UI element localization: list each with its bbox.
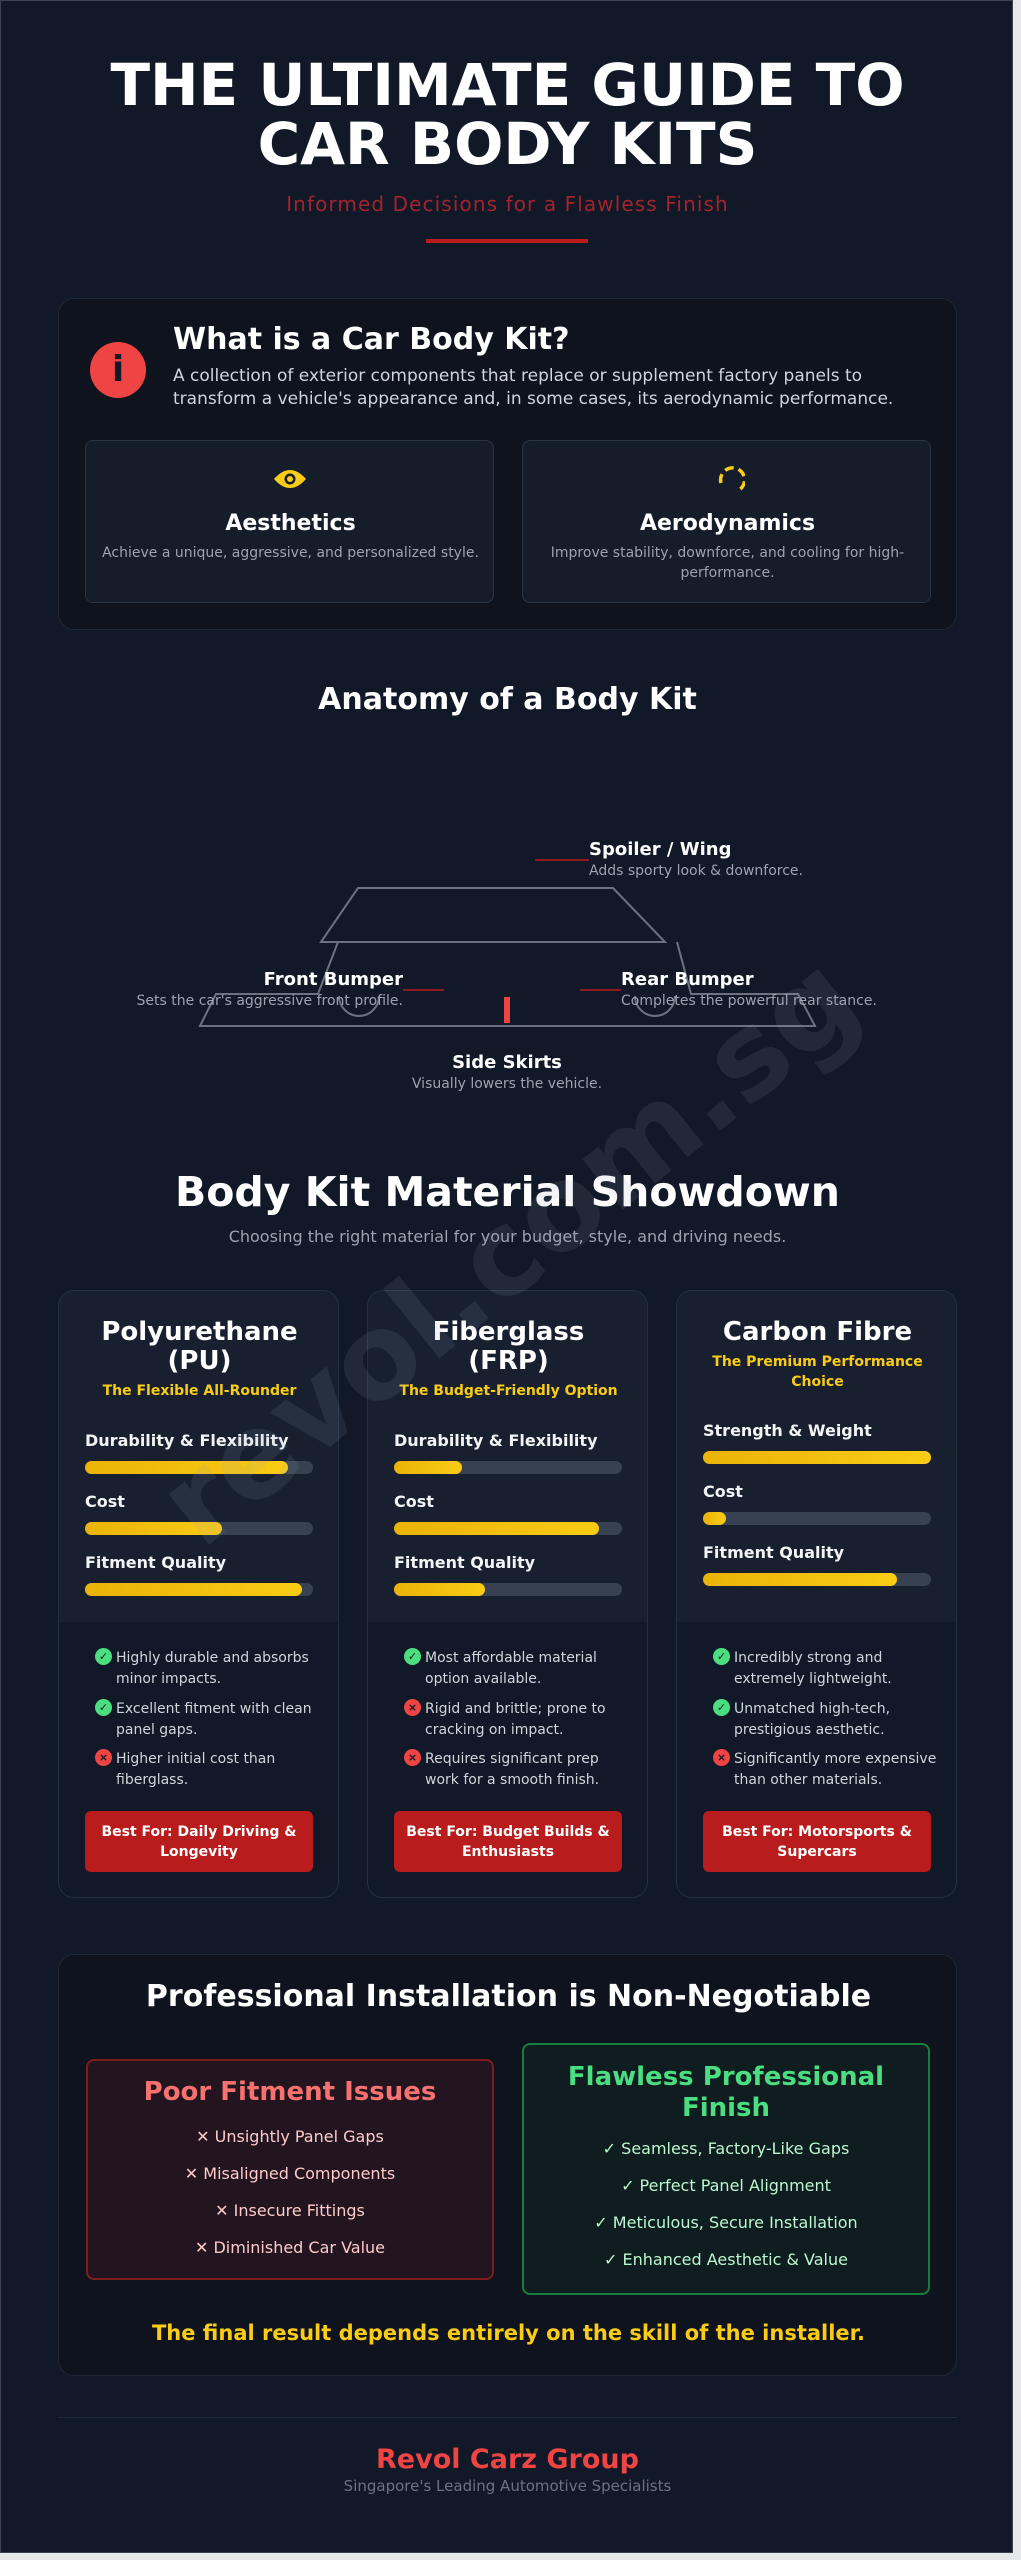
panel: carbon fibre <box>676 1290 957 1898</box>
panel: polyurethane: Highly durable and absorbs minor impacts. <box>116 1650 309 1686</box>
panel: fiberglass: × <box>408 1701 417 1714</box>
panel: carbon fibre: ✓ <box>717 1701 726 1714</box>
panel: carbon fibre: Unmatched high-tech, prestigious aesthetic. <box>734 1701 890 1738</box>
subcard: aerodynamics <box>522 440 931 603</box>
benefits list: ✓ Seamless, Factory-Like Gaps <box>603 2139 849 2158</box>
title: THE ULTIMATE GUIDE TO <box>110 51 905 119</box>
issues list: ✕ Unsightly Panel Gaps <box>196 2127 384 2146</box>
card title <box>433 1317 584 1376</box>
icon: info: i <box>112 349 124 390</box>
heading: material showdown: Body Kit Material Showdown <box>175 1168 840 1216</box>
panel: polyurethane: Higher initial cost than fiberglass. <box>116 1751 275 1788</box>
definition text: transform a vehicle's appearance and, in some cases, its aerodynamic performance. <box>173 389 893 409</box>
panel: fiberglass <box>367 1290 648 1898</box>
best for button: Best For: Budget Builds & <box>406 1824 610 1840</box>
panel: carbon fibre: ✓ <box>717 1650 726 1663</box>
panel: carbon fibre: Significantly more expensive than other materials. <box>734 1751 936 1788</box>
icon: info <box>90 342 146 398</box>
card title: Carbon Fibre <box>723 1317 912 1347</box>
benefits list: ✓ Perfect Panel Alignment <box>621 2176 831 2195</box>
bar: cost <box>85 1492 313 1535</box>
subtitle: Informed Decisions for a Flawless Finish <box>286 192 729 216</box>
issues list: ✕ Insecure Fittings <box>215 2201 365 2220</box>
issues list: ✕ Misaligned Components <box>185 2164 395 2183</box>
bar: strength <box>703 1421 931 1464</box>
callout: The final result depends entirely on the skill of the installer. <box>152 2321 865 2345</box>
best for button: Enthusiasts <box>462 1844 554 1860</box>
benefits list: ✓ Meticulous, Secure Installation <box>594 2213 858 2232</box>
tagline: The Premium Performance Choice <box>712 1354 923 1390</box>
bar: fitment <box>85 1553 313 1596</box>
label: front bumper: Front Bumper <box>264 969 403 990</box>
panel: carbon fibre: Incredibly strong and extremely lightweight. <box>734 1650 892 1686</box>
showdown subtitle: Choosing the right material for your budget, style, and driving needs. <box>229 1227 786 1246</box>
benefits list: ✓ Enhanced Aesthetic & Value <box>604 2250 848 2269</box>
label: spoiler <box>589 839 803 879</box>
panel: polyurethane: ✓ <box>99 1650 108 1663</box>
label: spoiler: Spoiler / Wing <box>589 839 731 860</box>
panel: fiberglass: × <box>408 1751 417 1764</box>
diagram: car body kit anatomy <box>137 839 877 1092</box>
bar: cost <box>703 1482 931 1525</box>
best for button <box>394 1811 622 1872</box>
bar: fitment: Fitment Quality <box>703 1543 844 1562</box>
bar: durability <box>394 1431 622 1474</box>
bar: cost: Cost <box>703 1482 743 1501</box>
best for button: Longevity <box>160 1844 238 1860</box>
box heading: Flawless Professional <box>568 2062 884 2092</box>
bar: cost <box>394 1492 622 1535</box>
icon: airflow <box>718 466 745 490</box>
label: side skirts: Side Skirts <box>452 1052 562 1073</box>
subcard: aesthetics <box>85 440 494 603</box>
heading: Aerodynamics <box>640 511 815 536</box>
best for button <box>85 1811 313 1872</box>
panel: polyurethane: × <box>99 1751 108 1764</box>
icon: eye <box>274 470 306 488</box>
bar: fitment <box>703 1543 931 1586</box>
box: flawless finish <box>522 2043 930 2295</box>
panel: polyurethane <box>58 1290 339 1898</box>
label: rear bumper <box>621 969 877 1009</box>
card title: (FRP) <box>468 1346 549 1376</box>
bar: cost: Cost <box>85 1492 125 1511</box>
description: Improve stability, downforce, and cooling for high-performance. <box>551 545 904 581</box>
panel: fiberglass: Rigid and brittle; prone to cracking on impact. <box>425 1701 606 1738</box>
definition text <box>173 366 893 409</box>
label: side skirts: Visually lowers the vehicle. <box>412 1076 602 1092</box>
panel: professional installation <box>58 1954 957 2376</box>
card title: (PU) <box>168 1346 231 1376</box>
panel: polyurethane: Excellent fitment with clean panel gaps. <box>116 1701 312 1738</box>
watermark: revol.com.sg <box>132 927 884 1573</box>
bar: cost: Cost <box>394 1492 434 1511</box>
label: rear bumper: Rear Bumper <box>621 969 754 990</box>
footer tagline: Singapore's Leading Automotive Specialists <box>344 2477 671 2495</box>
heading: Aesthetics <box>225 511 356 536</box>
best for button: Best For: Motorsports & <box>722 1824 912 1840</box>
panel: carbon fibre: × <box>717 1751 726 1764</box>
bar: durability: Durability & Flexibility <box>85 1431 288 1450</box>
label: side skirts <box>412 1052 602 1092</box>
heading: Professional Installation is Non-Negotiable <box>146 1979 871 2014</box>
label: front bumper <box>137 969 403 1009</box>
best for button <box>703 1811 931 1872</box>
bar: durability <box>85 1431 313 1474</box>
label: rear bumper: Completes the powerful rear stance. <box>621 993 877 1009</box>
benefits list <box>594 2139 858 2269</box>
heading: anatomy: Anatomy of a Body Kit <box>318 682 697 717</box>
box heading: Poor Fitment Issues <box>144 2077 436 2107</box>
box heading <box>568 2062 884 2123</box>
issues list: ✕ Diminished Car Value <box>195 2238 385 2257</box>
label: front bumper: Sets the car's aggressive front profile. <box>137 993 403 1009</box>
title underline <box>426 239 588 243</box>
description: Achieve a unique, aggressive, and personalized style. <box>102 545 479 561</box>
best for button: Best For: Daily Driving & <box>101 1824 297 1840</box>
box heading: Finish <box>682 2093 770 2123</box>
definition text: A collection of exterior components that replace or supplement factory panels to <box>173 366 862 386</box>
panel: fiberglass: Most affordable material option available. <box>425 1650 597 1686</box>
bar: durability: Durability & Flexibility <box>394 1431 598 1450</box>
panel: fiberglass: Requires significant prep work for a smooth finish. <box>425 1751 599 1788</box>
card title: Polyurethane <box>101 1317 298 1347</box>
title <box>110 51 905 178</box>
tagline: The Flexible All-Rounder <box>103 1383 296 1399</box>
car outline <box>198 859 816 1027</box>
panel: what is a car body kit <box>58 298 957 630</box>
issues list <box>185 2127 395 2257</box>
best for button: Supercars <box>777 1844 857 1860</box>
box: poor fitment <box>86 2059 494 2280</box>
label: spoiler: Adds sporty look & downforce. <box>589 863 803 879</box>
bar: fitment <box>394 1553 622 1596</box>
card title: Fiberglass <box>433 1317 584 1347</box>
panel: polyurethane: ✓ <box>99 1701 108 1714</box>
panel: fiberglass: ✓ <box>408 1650 417 1663</box>
bar: fitment: Fitment Quality <box>394 1553 535 1572</box>
heading: What is a Car Body Kit? <box>173 322 569 357</box>
bar: strength: Strength & Weight <box>703 1421 872 1440</box>
bar: fitment: Fitment Quality <box>85 1553 226 1572</box>
title: CAR BODY KITS <box>258 110 757 178</box>
card title <box>101 1317 298 1376</box>
tagline: The Budget-Friendly Option <box>399 1383 618 1399</box>
footer brand: Revol Carz Group <box>376 2444 639 2475</box>
